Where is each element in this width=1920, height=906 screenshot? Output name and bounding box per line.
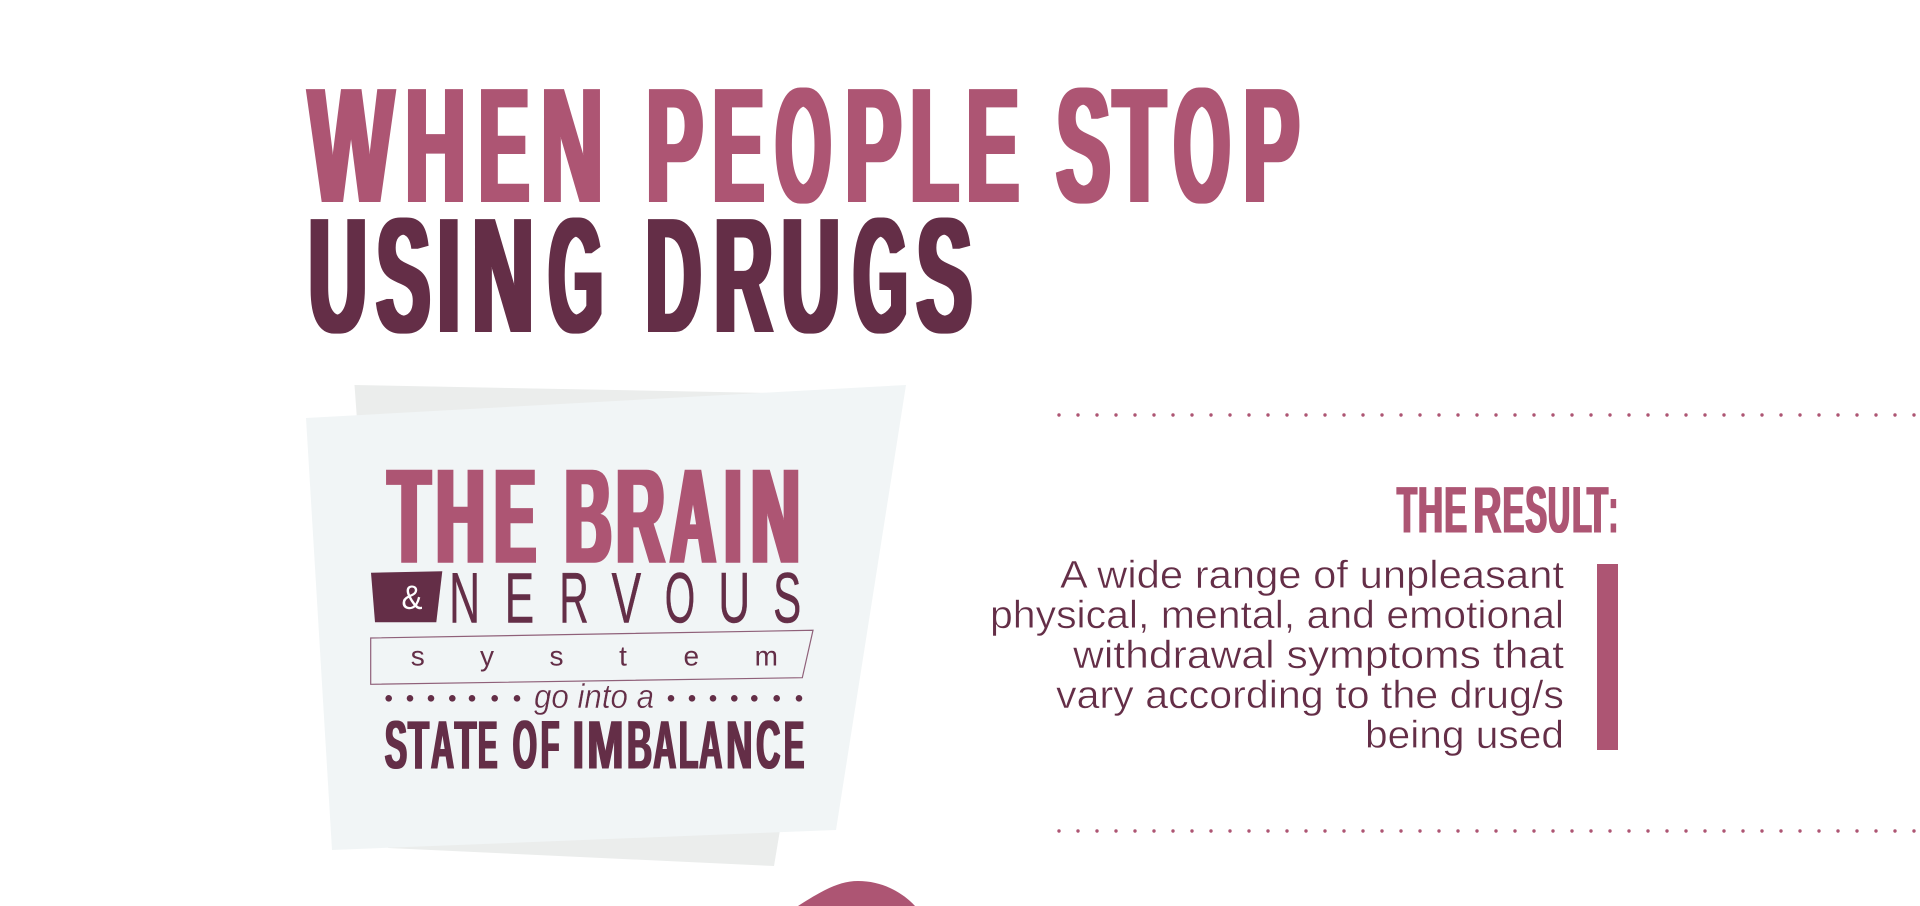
word: system: t (619, 641, 627, 672)
result heading (1397, 472, 1618, 546)
result heading: U (1548, 472, 1570, 546)
title line 1: N (541, 54, 603, 237)
heading: state of imbalance: L (679, 706, 698, 783)
heading: state of imbalance (385, 706, 804, 783)
heading: state of imbalance: F (541, 706, 559, 783)
heading: state of imbalance: A (653, 706, 676, 783)
result body text: vary according to the drug/s (1056, 674, 1564, 717)
result body text: A wide range of unpleasant (1060, 554, 1564, 597)
bottom blob (798, 881, 915, 906)
title line 2: G (549, 184, 603, 367)
result body text: withdrawal symptoms that (1072, 634, 1564, 677)
word: system: m (755, 641, 778, 672)
panel front sheet (306, 385, 906, 850)
word: nervous: N (449, 559, 480, 638)
heading: state of imbalance: B (627, 706, 652, 783)
heading: the brain: T (388, 441, 430, 592)
result accent bar (1597, 564, 1618, 750)
heading: state of imbalance: A (431, 706, 454, 783)
ampersand badge: & (402, 579, 423, 617)
heading: state of imbalance: T (455, 706, 476, 783)
title line 2: U (309, 184, 367, 367)
title line 1: O (1174, 54, 1230, 237)
word: system: s (550, 641, 564, 672)
title line 1: P (1243, 54, 1299, 237)
panel: brain and nervous system (306, 385, 906, 866)
result heading: T (1587, 472, 1608, 546)
title line 1: O (776, 54, 831, 237)
title line 1: P (845, 54, 901, 237)
heading: the brain: H (436, 441, 485, 592)
title (309, 54, 1299, 367)
heading: state of imbalance: C (756, 706, 780, 783)
word: nervous: O (665, 559, 695, 638)
dotted phrase: go into a: go into a (534, 678, 654, 716)
result heading: H (1418, 472, 1443, 546)
title line 2: I (438, 184, 460, 367)
title line 1: W (309, 54, 394, 237)
word: nervous: S (773, 559, 801, 638)
result body text: physical, mental, and emotional (990, 594, 1564, 637)
result body text: being used (1365, 714, 1564, 757)
text: : (1609, 472, 1618, 546)
heading: state of imbalance: I (572, 706, 584, 783)
word: nervous: E (505, 559, 534, 638)
result heading: R (1473, 472, 1502, 546)
system box (371, 630, 813, 684)
title line 2: S (917, 184, 972, 367)
heading: the brain: B (565, 441, 611, 592)
word: system: s (411, 641, 425, 672)
title line 1: L (910, 54, 958, 237)
result heading: S (1525, 472, 1547, 546)
heading: the brain: I (725, 441, 741, 592)
heading: the brain (388, 441, 800, 592)
panel: brain and nervous system: N (751, 441, 800, 592)
result heading: T (1397, 472, 1417, 546)
panel: brain and nervous system: E (784, 706, 804, 783)
result heading: E (1503, 472, 1524, 546)
dotted rule top (1059, 413, 1920, 417)
title line 2: R (714, 184, 773, 367)
word: nervous: U (718, 559, 750, 638)
title line 2: N (472, 184, 534, 367)
heading: state of imbalance: T (408, 706, 429, 783)
heading: the brain: E (495, 441, 535, 592)
title line 1: E (967, 54, 1019, 237)
result heading: L (1572, 472, 1592, 546)
heading: state of imbalance: A (699, 706, 722, 783)
result heading: E (1444, 472, 1467, 546)
title line 2: S (376, 184, 430, 367)
dotted rule bottom (1059, 829, 1920, 833)
title line 1: S (1056, 54, 1110, 237)
heading: state of imbalance: S (385, 706, 407, 783)
heading: state of imbalance: E (478, 706, 497, 783)
heading: state of imbalance: O (513, 706, 537, 783)
heading: state of imbalance: N (726, 706, 752, 783)
word: system: y (480, 641, 494, 672)
word: nervous: V (612, 559, 642, 638)
title line 2: G (854, 184, 907, 367)
title line 1: T (1113, 54, 1165, 237)
result body text (990, 554, 1564, 757)
word: nervous: R (559, 559, 589, 638)
heading: the brain: A (671, 441, 715, 592)
title line 2: D (646, 184, 701, 367)
title line 1: E (713, 54, 764, 237)
title line 1: P (646, 54, 703, 237)
word: system: e (684, 641, 699, 672)
panel back sheet (354, 385, 780, 866)
title line 2: U (782, 184, 840, 367)
heading: state of imbalance: M (587, 706, 624, 783)
ampersand badge (371, 571, 442, 622)
title line 1: H (405, 54, 466, 237)
title line 1: E (479, 54, 529, 237)
dotted phrase: go into a (385, 678, 802, 716)
heading: the brain: R (616, 441, 664, 592)
